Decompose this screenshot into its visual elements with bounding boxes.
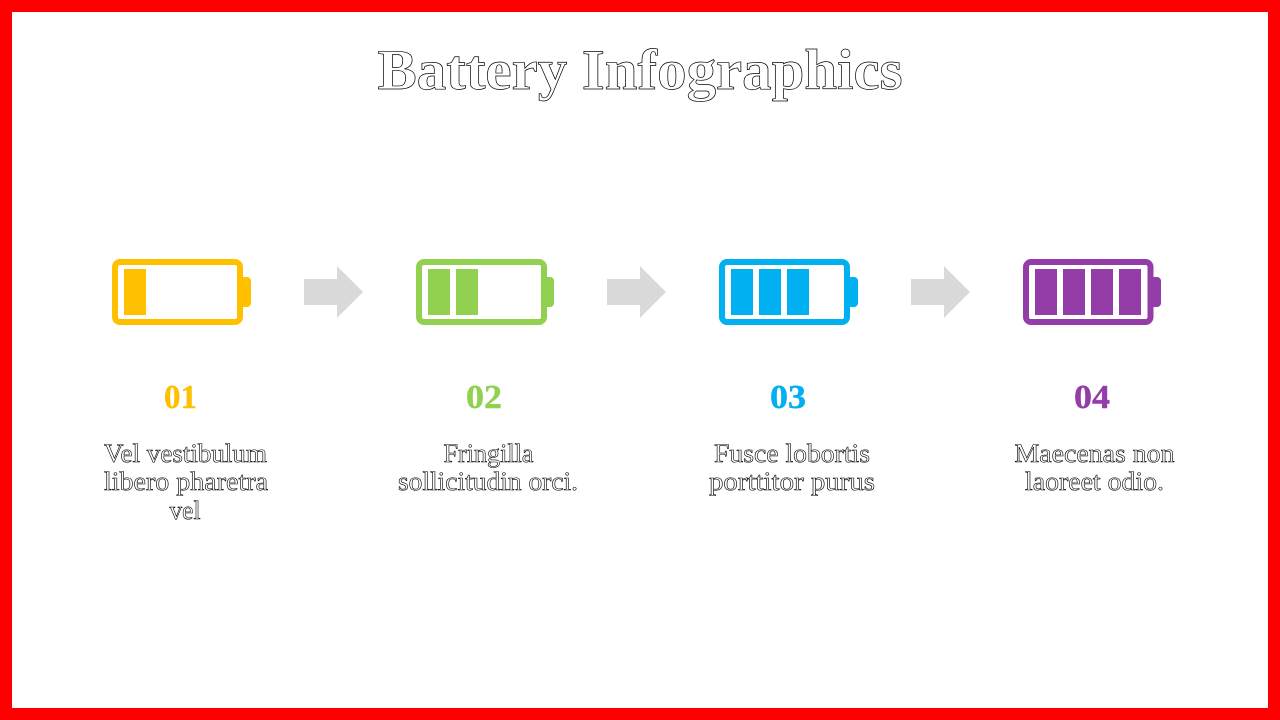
text block 2 (398, 439, 578, 496)
number 01: 01 (164, 379, 197, 416)
text block 2: sollicitudin orci. (398, 467, 578, 496)
title: Battery Infographics (378, 39, 902, 102)
text block 1 (104, 439, 268, 525)
text block 4 (1014, 439, 1174, 496)
text block 4: Maecenas non (1014, 439, 1174, 468)
arrow 1 (304, 266, 363, 318)
text block 1: Vel vestibulum (104, 439, 267, 468)
icon: battery four bars (1026, 262, 1161, 322)
arrow 2 (607, 266, 666, 318)
text block 4: laoreet odio. (1025, 467, 1164, 496)
number 02: 02 (466, 379, 502, 416)
icon: battery three bars (722, 262, 858, 322)
text block 1: libero pharetra (104, 467, 268, 496)
number 03: 03 (770, 379, 806, 416)
number 04: 04 (1074, 379, 1110, 416)
icon: battery one bar (115, 262, 251, 322)
text block 3 (709, 439, 875, 496)
text block 2: Fringilla (444, 439, 534, 468)
text block 3: Fusce lobortis (714, 439, 870, 468)
arrow 3 (911, 266, 970, 318)
icon: battery two bars (419, 262, 554, 322)
text block 1: vel (170, 496, 200, 525)
text block 3: porttitor purus (709, 467, 875, 496)
